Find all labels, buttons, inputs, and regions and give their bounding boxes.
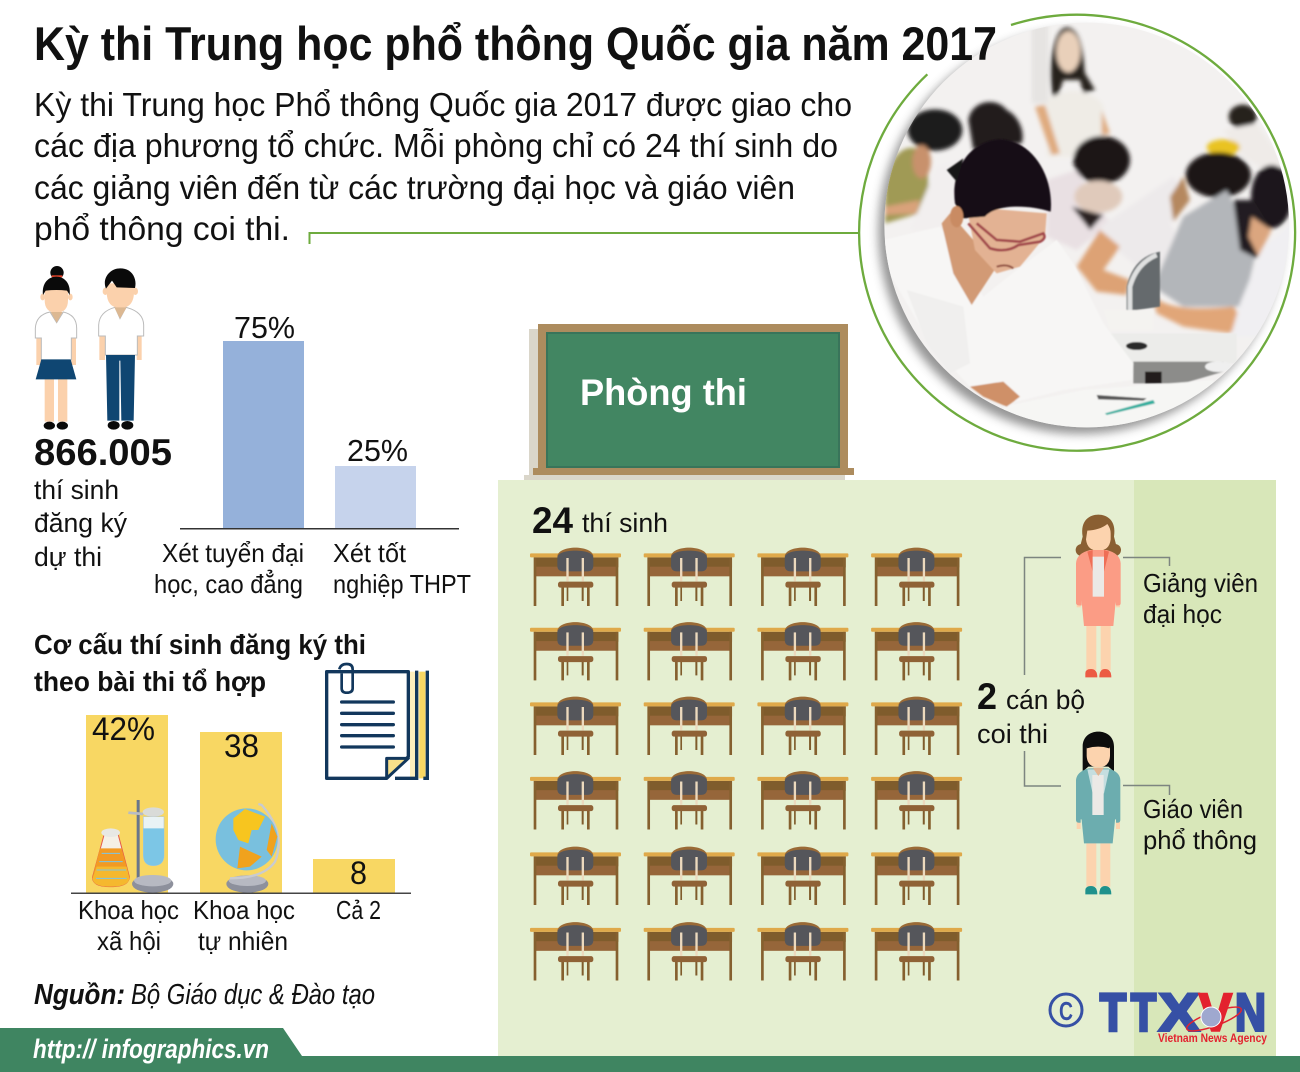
- label: 2 invigilators: cán bộ: [1006, 685, 1085, 715]
- bar chart: subject groups: 8: [350, 855, 367, 891]
- bar chart: exam purpose: học, cao đẳng: [154, 568, 303, 599]
- label: 2 invigilators: 2: [977, 676, 997, 717]
- label: high school teacher: phổ thông: [1143, 825, 1257, 855]
- intro paragraph: phổ thông coi thi.: [34, 210, 290, 247]
- pens on desk: [1097, 395, 1147, 401]
- stat: registered candidates: thí sinh: [34, 475, 119, 505]
- chair: [1126, 250, 1161, 311]
- bar chart: subject groups: 38: [224, 728, 259, 764]
- label: 24 candidates: [532, 500, 668, 541]
- bar chart: subject groups: Khoa học: [193, 895, 295, 925]
- label: university lecturer: [1143, 568, 1258, 629]
- heading: combined exam structure: theo bài thi tổ hợp: [34, 666, 266, 697]
- hand: [970, 382, 1020, 407]
- intro paragraph: [34, 86, 852, 247]
- neck and face: [942, 213, 997, 305]
- bar chart: subject groups: xã hội: [97, 926, 161, 956]
- bar chart: subject groups: Cả 2: [336, 895, 381, 925]
- logo: copyright and TTXVN: T: [1100, 984, 1126, 1042]
- intro paragraph: các giảng viên đến từ các trường đại học và giáo viên: [34, 169, 795, 206]
- logo: copyright and TTXVN: T: [1131, 984, 1156, 1042]
- icon: documents: [327, 664, 427, 778]
- title: Kỳ thi Trung học phổ thông Quốc gia năm 2017: [34, 17, 997, 70]
- label: university lecturer: Giảng viên: [1143, 568, 1258, 598]
- logo: copyright and TTXVN: X: [1159, 984, 1199, 1042]
- label: high school teacher: Giáo viên: [1143, 794, 1243, 824]
- bar chart: exam purpose: 75%: [234, 310, 295, 345]
- intro paragraph: các địa phương tổ chức. Mỗi phòng chỉ có 24 thí sinh do: [34, 127, 838, 164]
- logo: copyright and TTXVN: Vietnam News Agency: [1158, 1033, 1268, 1045]
- icon: chemistry flasks: [93, 800, 173, 893]
- photo shadow: [878, 29, 1283, 434]
- bar chart: subject groups: [71, 711, 411, 956]
- icon: globe: [216, 804, 279, 893]
- label: 24 candidates: thí sinh: [582, 508, 668, 538]
- bar chart: exam purpose: 25%: [347, 433, 408, 468]
- heading: combined exam structure: [34, 629, 366, 697]
- photo: students taking exam: [859, 15, 1295, 451]
- stat: registered candidates: đăng ký: [34, 508, 127, 538]
- bar chart: exam purpose: nghiệp THPT: [333, 569, 471, 599]
- footer bar: [0, 1028, 1300, 1072]
- blackboard: Phòng thi: [580, 372, 747, 413]
- icon: male student: [99, 268, 144, 430]
- stat: registered candidates: dự thi: [34, 542, 102, 572]
- label: 2 invigilators: [977, 676, 1085, 749]
- intro paragraph: Kỳ thi Trung học Phổ thông Quốc gia 2017 được giao cho: [34, 86, 852, 123]
- desk grid: 24 candidates: [530, 548, 962, 980]
- source: Nguồn:: [34, 979, 125, 1011]
- label: 24 candidates: 24: [532, 500, 573, 541]
- heading: combined exam structure: Cơ cấu thí sinh đăng ký thi: [34, 629, 366, 660]
- connector lines: invigilators: [1024, 558, 1170, 795]
- bar chart: exam purpose: Xét tuyển đại: [162, 538, 304, 568]
- callout line to photo: [310, 233, 858, 244]
- panel: exam room background: [498, 480, 1276, 1056]
- icon: female student: [35, 266, 77, 430]
- icon: university lecturer: [1076, 515, 1121, 677]
- logo: copyright and TTXVN: [1050, 984, 1268, 1045]
- bar chart: subject groups: tự nhiên: [198, 926, 288, 956]
- label: university lecturer: đại học: [1143, 599, 1222, 629]
- hair: [954, 139, 1051, 218]
- label: high school teacher: [1143, 794, 1257, 855]
- source: [34, 979, 375, 1011]
- desks: [1047, 333, 1237, 373]
- bar chart: subject groups: Khoa học: [78, 895, 179, 925]
- logo: copyright and TTXVN: C: [1059, 996, 1073, 1026]
- ring outline: [859, 15, 1295, 451]
- bar chart: exam purpose: Xét tốt: [333, 538, 407, 568]
- stat: registered candidates: [34, 432, 172, 572]
- glasses: [968, 223, 1044, 250]
- icon: high school teacher: [1076, 732, 1120, 894]
- logo: copyright and TTXVN: N: [1235, 984, 1266, 1042]
- bar chart: exam purpose: [154, 310, 471, 599]
- website url: http:// infographics.vn: [33, 1034, 269, 1064]
- source: Bộ Giáo dục & Đào tạo: [131, 979, 375, 1011]
- label: 2 invigilators: coi thi: [977, 719, 1048, 749]
- blackboard: [524, 324, 854, 480]
- foreground student shirt: [883, 227, 1133, 402]
- logo: copyright and TTXVN: V: [1199, 984, 1232, 1042]
- bar chart: subject groups: 42%: [92, 711, 155, 747]
- stat: registered candidates: 866.005: [34, 432, 172, 473]
